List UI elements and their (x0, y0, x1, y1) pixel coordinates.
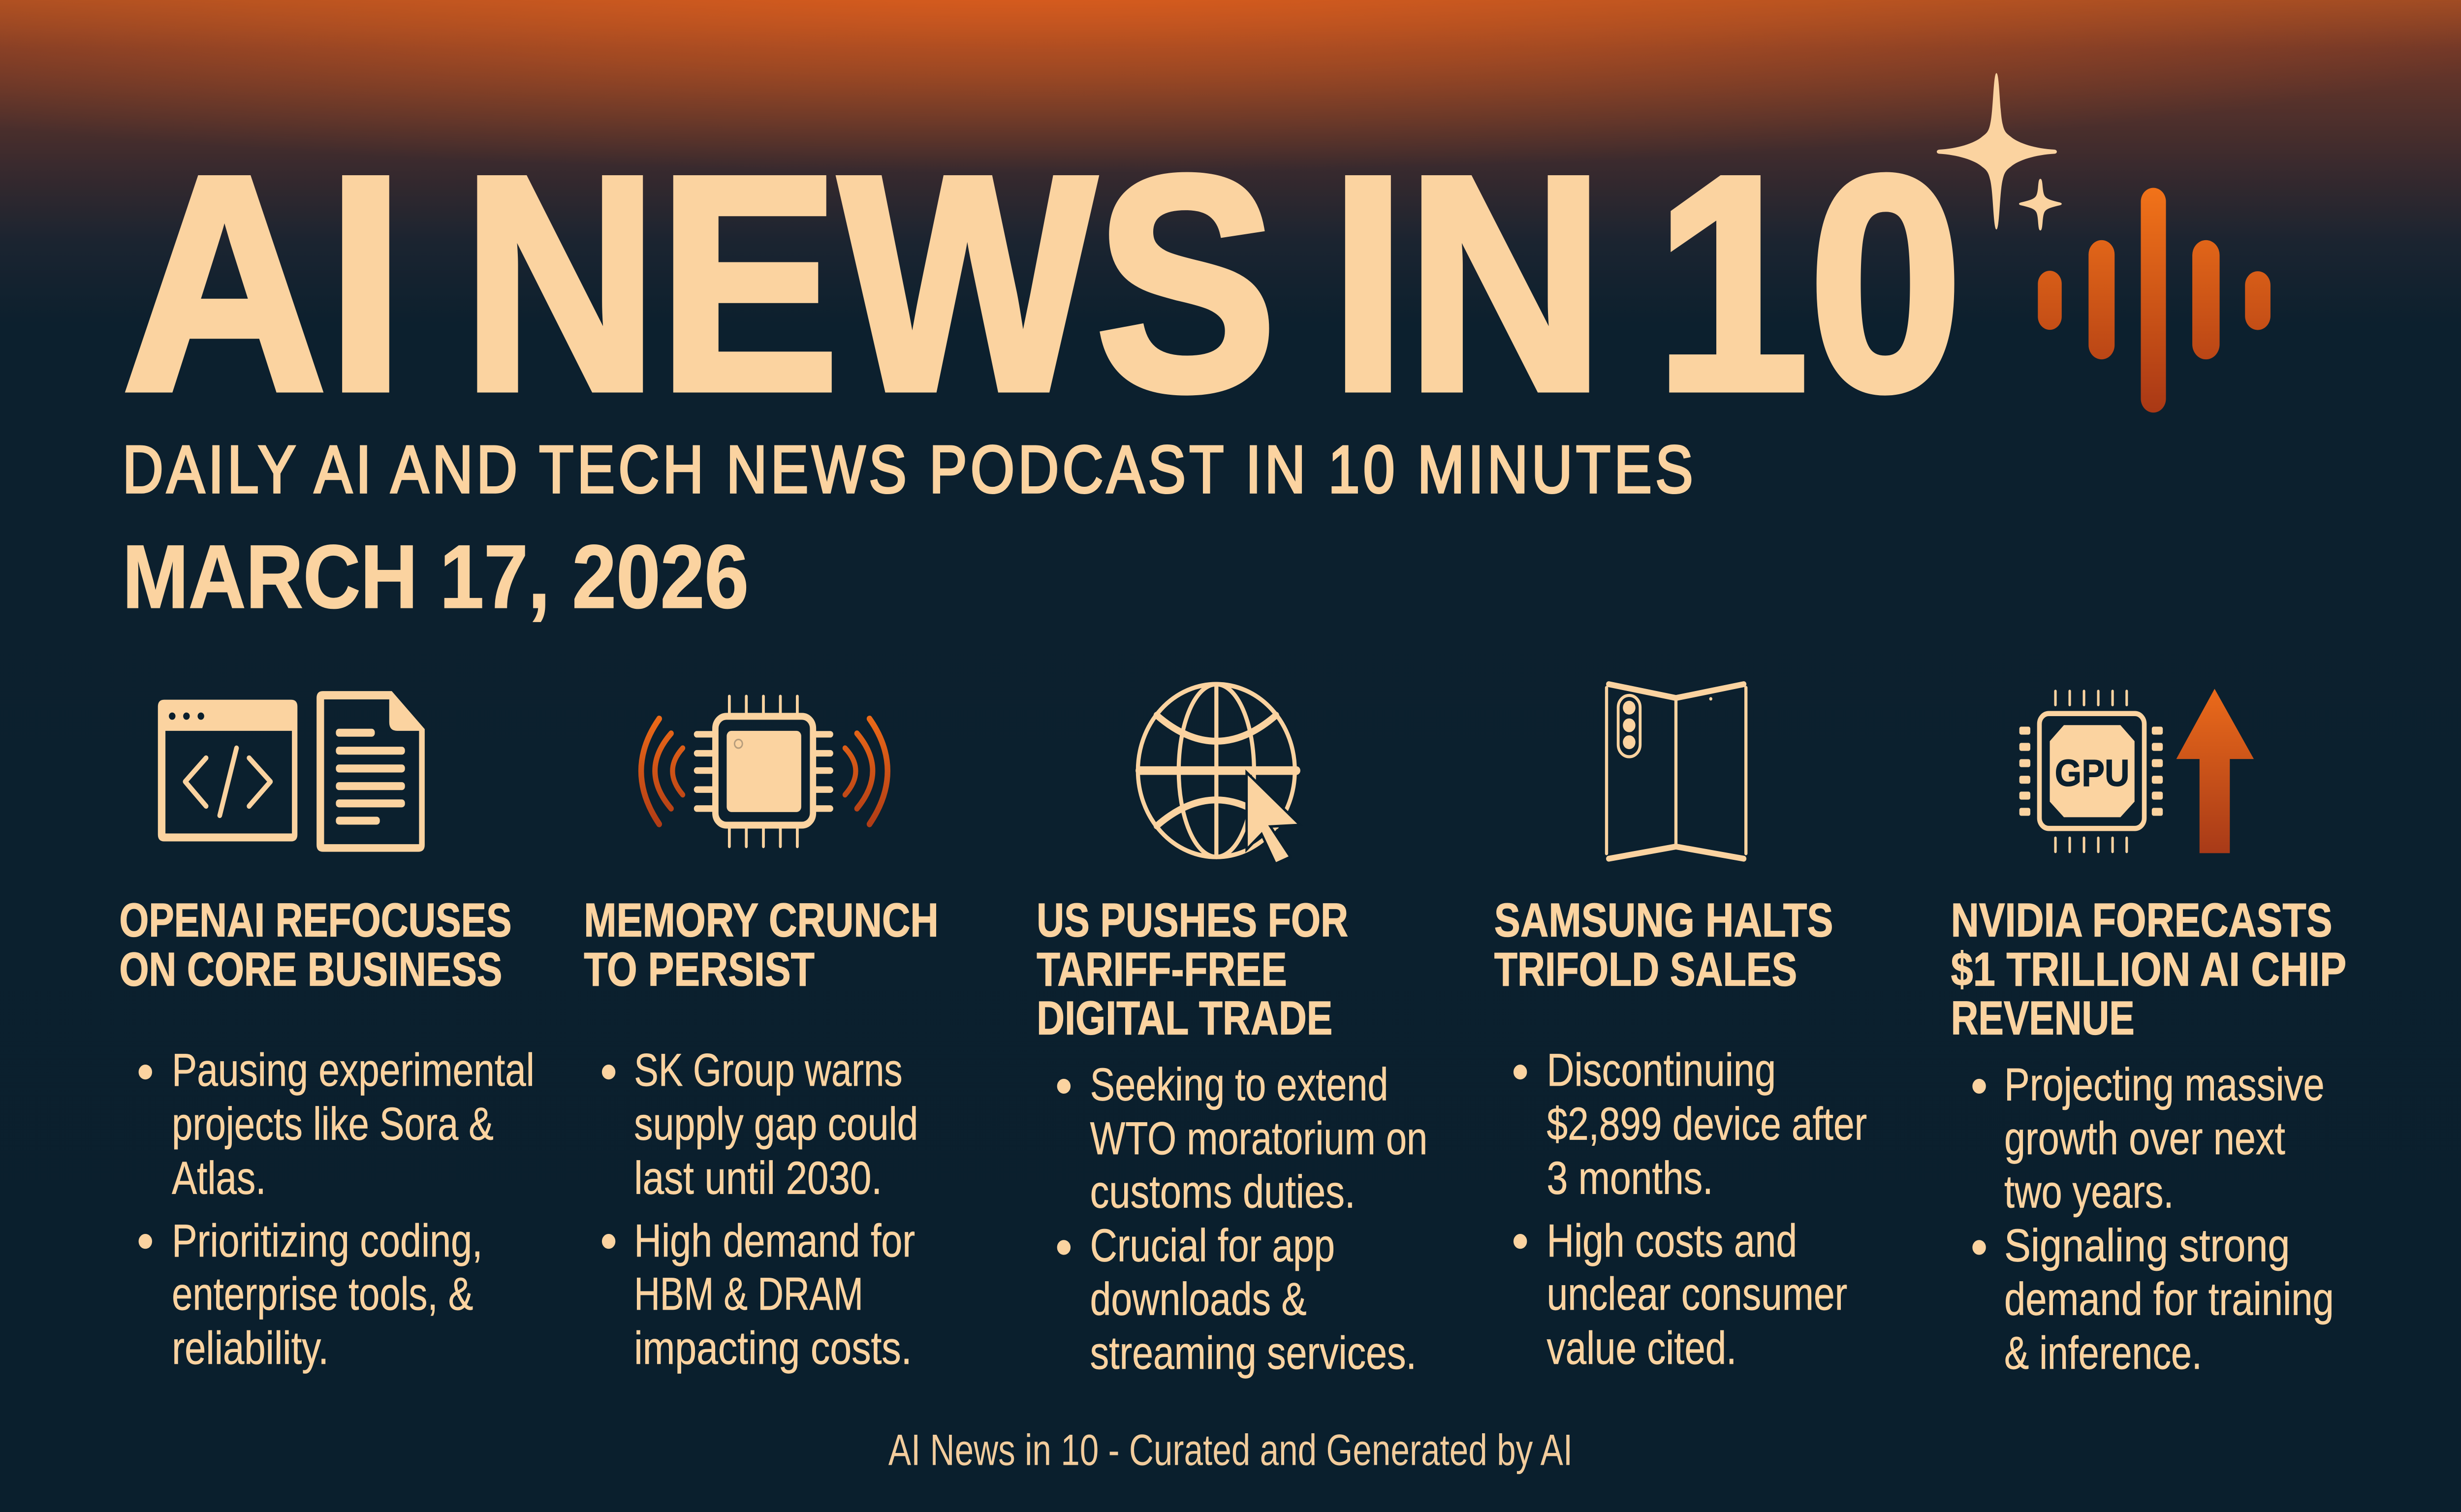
bullet list: streaming services. (1090, 1327, 1417, 1379)
panel: Samsung trifold (1494, 684, 1867, 1374)
bullet list: downloads & (1090, 1274, 1307, 1325)
bullet list (602, 1044, 918, 1374)
bullet list: $2,899 device after (1547, 1099, 1867, 1150)
panel: tariff-free digital trade (1037, 684, 1427, 1379)
heading (1494, 894, 1833, 996)
bullet list: SK Group warns (634, 1044, 903, 1096)
title: IN (1330, 112, 1605, 454)
bullet list: High demand for (634, 1215, 915, 1267)
bullet list: Prioritizing coding, (172, 1215, 483, 1267)
bullet list (1514, 1044, 1867, 1374)
heading: OPENAI REFOCUSES (119, 894, 512, 947)
heading: SAMSUNG HALTS (1494, 894, 1833, 947)
bullet list: Signaling strong (2004, 1220, 2290, 1271)
bullet list: last until 2030. (634, 1153, 882, 1204)
heading: REVENUE (1951, 992, 2135, 1044)
bullet list: unclear consumer (1547, 1268, 1847, 1320)
bullet list: WTO moratorium on (1090, 1113, 1427, 1165)
heading: US PUSHES FOR (1037, 894, 1348, 947)
icon: sparkles (1937, 73, 2062, 230)
panel: OpenAI refocuses (119, 691, 535, 1374)
title: AI (123, 112, 405, 454)
bullet list: two years. (2004, 1166, 2174, 1218)
icon: GPU chip with rising arrow (2019, 689, 2254, 853)
bullet list: Seeking to extend (1090, 1059, 1388, 1110)
icon: GPU chip with rising arrow: GPU (2055, 752, 2130, 794)
heading (119, 894, 512, 996)
title (123, 112, 1962, 454)
icon: foldable phone (1607, 684, 1746, 859)
bullet list: demand for training (2004, 1274, 2334, 1325)
bullet list: growth over next (2004, 1113, 2285, 1165)
bullet list: reliability. (172, 1323, 329, 1374)
heading: MEMORY CRUNCH (584, 894, 939, 947)
bullet list: impacting costs. (634, 1323, 912, 1374)
icon: audio waveform (2038, 188, 2271, 412)
bullet list: Pausing experimental (172, 1044, 535, 1096)
heading: DIGITAL TRADE (1037, 992, 1332, 1044)
bullet list: Atlas. (172, 1153, 266, 1204)
heading: TO PERSIST (584, 944, 815, 996)
icon: globe with cursor (1138, 684, 1297, 862)
bullet list: enterprise tools, & (172, 1268, 473, 1320)
bullet list (1057, 1059, 1427, 1379)
heading (1037, 894, 1348, 1044)
bullet list: & inference. (2004, 1327, 2202, 1379)
bullet list: Crucial for app (1090, 1220, 1335, 1271)
heading: $1 TRILLION AI CHIP (1951, 944, 2346, 996)
heading (1951, 894, 2346, 1044)
bullet list: projects like Sora & (172, 1099, 494, 1150)
bullet list: Discontinuing (1547, 1044, 1776, 1096)
heading: NVIDIA FORECASTS (1951, 894, 2333, 947)
heading: TARIFF-FREE (1037, 944, 1287, 996)
heading: TRIFOLD SALES (1494, 944, 1797, 996)
bullet list: customs duties. (1090, 1166, 1356, 1218)
bullet list: High costs and (1547, 1215, 1797, 1267)
bullet list (1973, 1059, 2334, 1379)
title: NEWS (462, 112, 1277, 454)
icon: memory chip with signal waves (641, 696, 887, 847)
icon: code window and document (158, 691, 425, 852)
heading: ON CORE BUSINESS (119, 944, 502, 996)
bullet list: HBM & DRAM (634, 1268, 863, 1320)
footer: AI News in 10 - Curated and Generated by AI (888, 1426, 1573, 1475)
bullet list: Projecting massive (2004, 1059, 2325, 1110)
heading (584, 894, 939, 996)
bullet list: supply gap could (634, 1099, 918, 1150)
date: MARCH 17, 2026 (123, 526, 749, 627)
panel: Nvidia forecast (1951, 689, 2346, 1379)
panel: memory crunch (584, 696, 939, 1374)
subtitle: DAILY AI AND TECH NEWS PODCAST IN 10 MINUTES (123, 432, 1693, 507)
bullet list (139, 1044, 535, 1374)
bullet list: value cited. (1547, 1323, 1736, 1374)
bullet list: 3 months. (1547, 1153, 1713, 1204)
title: 10 (1655, 112, 1962, 454)
